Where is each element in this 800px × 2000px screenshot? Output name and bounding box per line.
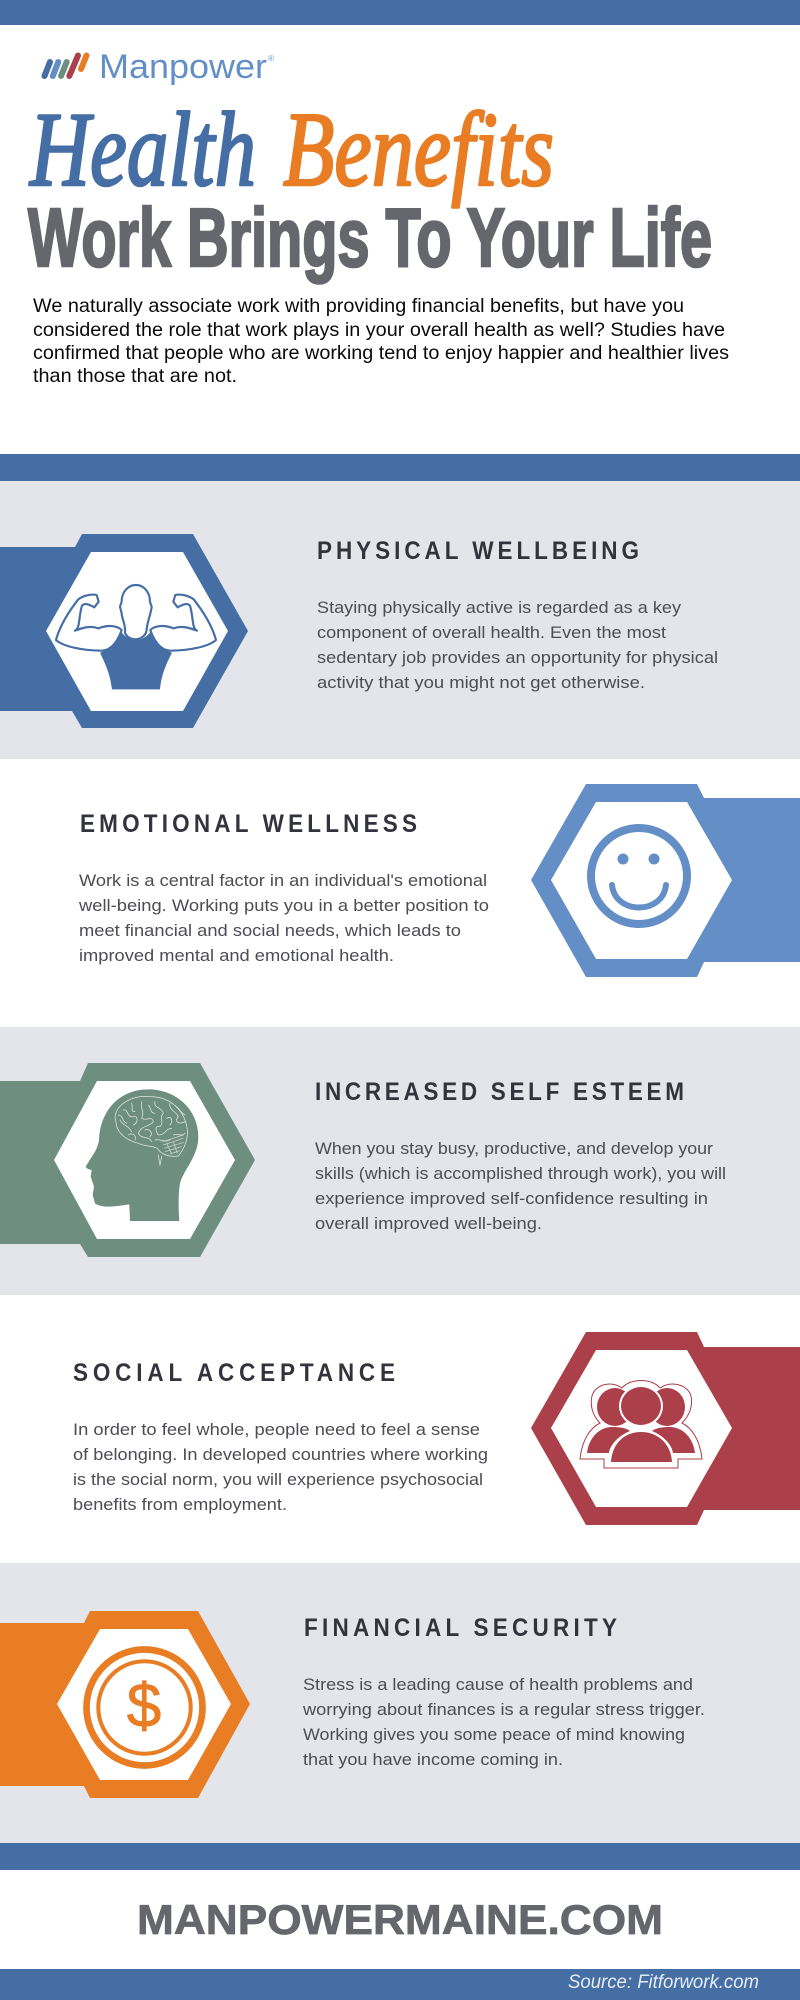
body text: well-being. Working puts you in a better position to [78,896,489,915]
panel: increased self esteem [0,1027,800,1295]
body text: benefits from employment. [73,1495,287,1514]
icon: dollar coin in hexagon: $ [127,1672,161,1741]
intro paragraph [33,295,729,387]
body text: activity that you might not get otherwise. [317,673,645,692]
icon: group of people in hexagon [531,1332,800,1525]
icon: smiley in hexagon [531,784,800,977]
intro paragraph: confirmed that people who are working tend to enjoy happier and healthier lives [33,342,729,364]
divider bar [0,454,800,481]
heading: EMOTIONAL WELLNESS [80,810,417,838]
top bar [0,0,800,25]
body text: improved mental and emotional health. [79,946,394,965]
body text: overall improved well-being. [315,1214,542,1233]
icon: flexing figure in hexagon [0,534,248,728]
heading: INCREASED SELF ESTEEM [315,1078,684,1106]
body text: is the social norm, you will experience psychosocial [73,1470,483,1489]
intro paragraph: considered the role that work plays in your overall health as well? Studies have [33,319,725,341]
title: Health Benefits [28,91,554,208]
icon: head with brain in hexagon [0,1063,255,1257]
body text [317,598,718,692]
body text: In order to feel whole, people need to feel a sense [73,1420,480,1439]
icon: dollar coin in hexagon [0,1611,250,1798]
body text: Staying physically active is regarded as a key [317,598,682,617]
divider bar [0,1843,800,1870]
body text [302,1675,705,1769]
intro paragraph: than those that are not. [33,365,237,387]
heading: FINANCIAL SECURITY [304,1614,617,1642]
body text: meet financial and social needs, which leads to [79,921,461,940]
body text: skills (which is accomplished through work), you will [315,1164,726,1183]
body text: When you stay busy, productive, and develop your [315,1139,713,1158]
panel: physical wellbeing [0,481,800,759]
body text: of belonging. In developed countries where working [73,1445,488,1464]
heading: SOCIAL ACCEPTANCE [73,1359,395,1387]
logo: Manpower: Manpower [99,48,267,86]
body text: sedentary job provides an opportunity for physical [317,648,718,667]
bottom bar with source: Source: Fitforwork.com [568,1971,759,1993]
panel: emotional wellness [78,784,800,977]
body text [78,871,489,965]
body text: experience improved self-confidence resulting in [315,1189,708,1208]
heading: PHYSICAL WELLBEING [317,537,639,565]
body text [315,1139,726,1233]
intro paragraph: We naturally associate work with providing financial benefits, but have you [33,295,684,317]
body text: Stress is a leading cause of health problems and [303,1675,693,1694]
title: Health Benefits: Health [28,91,256,208]
title: Health Benefits: Benefits [283,91,554,208]
panel: financial security [0,1563,800,1843]
body text: that you have income coming in. [303,1750,563,1769]
body text [73,1420,488,1514]
bottom bar with source [0,1969,800,2000]
footer website: MANPOWERMAINE.COM [137,1896,663,1943]
body text: Work is a central factor in an individual's emotional [79,871,487,890]
logo: Manpower: ® [268,54,274,63]
panel: social acceptance [73,1332,800,1525]
body text: Working gives you some peace of mind knowing [303,1725,685,1744]
logo: Manpower [44,48,274,86]
body text: worrying about finances is a regular stress trigger. [302,1700,705,1719]
body text: component of overall health. Even the most [317,623,666,642]
